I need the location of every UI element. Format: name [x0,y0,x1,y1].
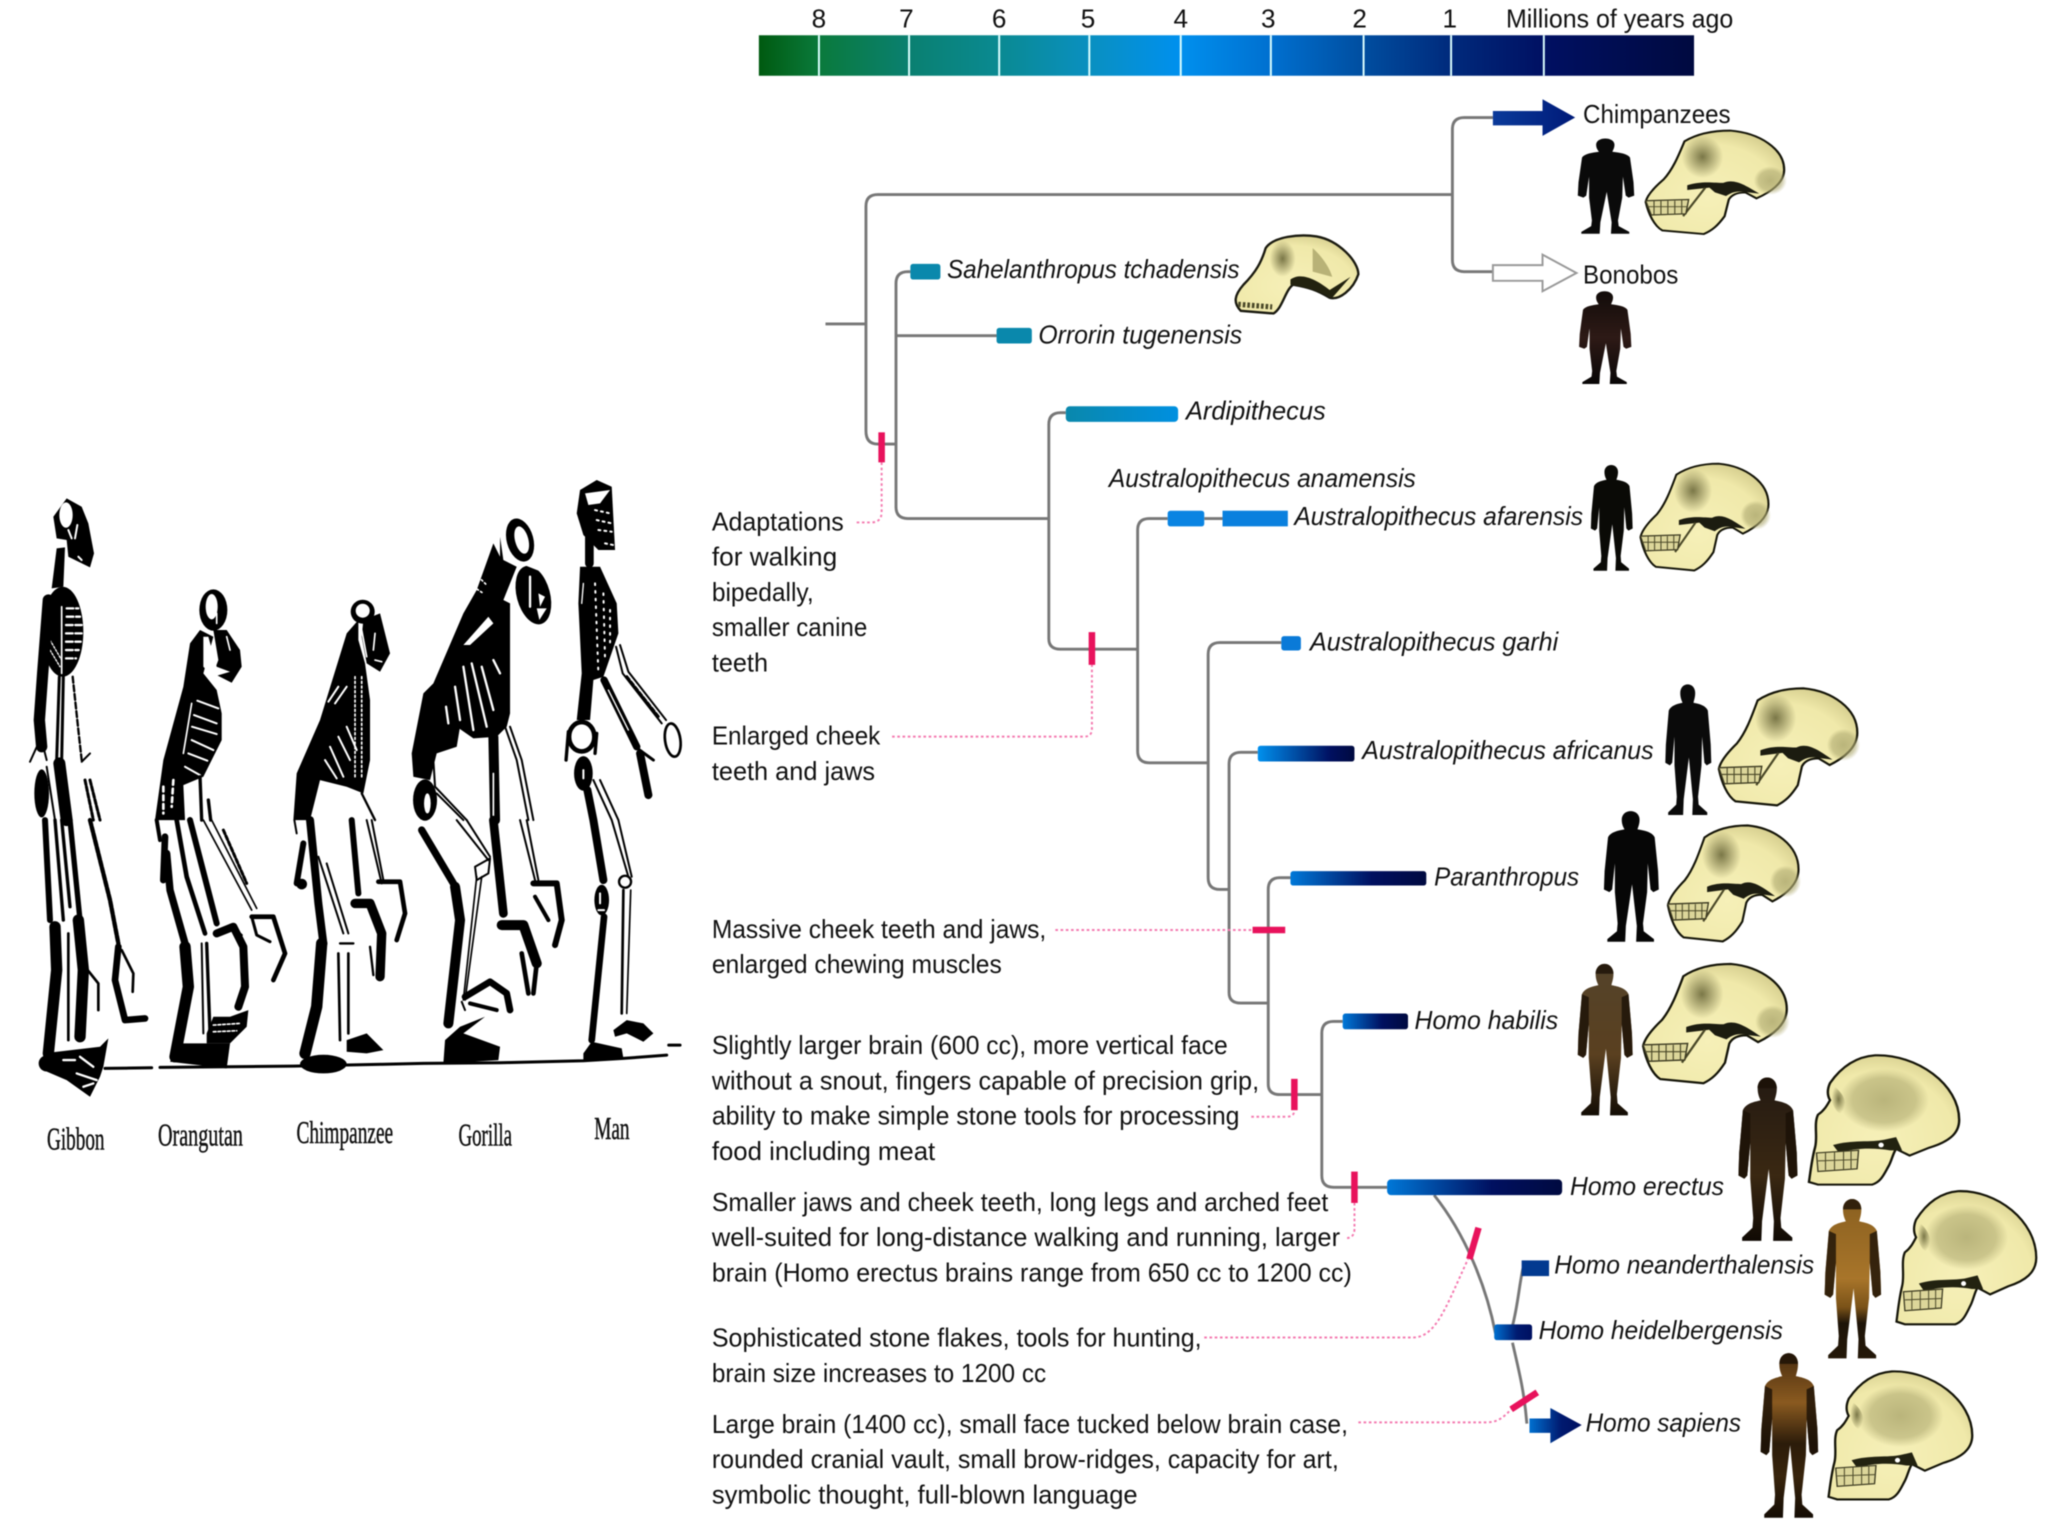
name: Australopithecus africanus [1360,735,1654,765]
duration bar: anamensis [1168,511,1204,526]
duration bar [1066,406,1178,422]
duration bar [997,328,1032,344]
scale numbers: 7 [899,3,914,33]
skull: chimpanzee [1646,131,1787,234]
name: Homo sapiens [1586,1408,1741,1438]
skeleton: man [566,480,683,1062]
figure: bonobo [1579,291,1631,384]
text: smaller canine [712,612,867,642]
text [711,1030,1259,1166]
text: Large brain (1400 cc), small face tucked below brain case, [712,1409,1348,1439]
text [712,1409,1348,1509]
figure: neanderthal [1825,1199,1881,1358]
trait tick and leader [1251,1110,1294,1117]
annotation: Large brain [712,1392,1537,1509]
name: Homo habilis [1415,1005,1558,1035]
text: bipedally, [712,577,814,607]
skull: neanderthal [1896,1191,2036,1324]
duration bar [1343,1014,1408,1029]
figure: erectus [1738,1078,1797,1241]
duration bar [910,264,940,280]
name: Orrorin tugenensis [1038,320,1242,350]
scale numbers: 8 [812,3,826,33]
text: symbolic thought, full-blown language [712,1479,1138,1509]
species: Australopithecus garhi [1281,626,1559,656]
figure: chimpanzee [1578,138,1634,234]
skeleton: gorilla [412,515,562,1063]
skeleton: gibbon [30,498,145,1097]
skull: afarensis [1640,464,1771,570]
figure: africanus [1665,684,1711,815]
text: for walking [712,542,837,572]
trait tick and leader [1055,929,1253,931]
name: Sahelanthropus tchadensis [947,254,1240,284]
branch: bonobos [1493,255,1678,384]
species: Homo erectus [1387,1055,1959,1241]
arrow: chimpanzees lineage [1493,99,1575,136]
name: afarensis: Australopithecus afarensis [1292,501,1583,531]
skull: africanus [1719,688,1860,805]
trait tick and leader [1345,1203,1354,1238]
timeline scale [759,3,1733,76]
name: anamensis: Australopithecus anamensis [1107,463,1416,493]
text [712,506,867,677]
skull: Sahelanthropus [1236,235,1358,313]
duration bar [1290,871,1426,886]
scale numbers: 3 [1261,3,1276,33]
species: Homo habilis [1343,964,1790,1115]
scale numbers: Millions of years ago [1506,3,1733,33]
species: Paranthropus [1290,811,1801,942]
skull: sapiens [1829,1371,1972,1499]
text: Smaller jaws and cheek teeth, long legs and arched feet [712,1187,1329,1217]
text: teeth [712,647,768,677]
species: Homo neanderthalensis [1522,1191,2036,1358]
text: rounded cranial vault, small brow-ridges, capacity for art, [712,1444,1339,1474]
species labels: Gibbon [47,1121,105,1156]
gradient time bar [759,35,1694,76]
name: Homo heidelbergensis [1539,1315,1783,1345]
species: Ardipithecus [1066,395,1326,425]
duration bar: afarensis [1223,511,1288,526]
text [712,914,1046,979]
annotation: Adaptations for walking bipedally [712,432,882,677]
branch: chimpanzees [1493,99,1787,234]
skull: erectus [1809,1055,1959,1185]
scale numbers: 5 [1081,3,1095,33]
name: Australopithecus garhi [1308,626,1559,656]
duration bar [1494,1324,1532,1340]
species: Orrorin tugenensis [997,320,1242,350]
skull: habilis [1643,964,1790,1083]
annotation: Sophisticated stone flakes [712,1228,1479,1388]
skeleton illustrations [30,480,683,1097]
name: Homo erectus [1570,1171,1724,1201]
figure: sapiens [1761,1353,1818,1518]
species labels: Chimpanzee [296,1115,393,1150]
annotation: Slightly larger brain [711,1030,1294,1166]
text: Enlarged cheek [712,720,881,750]
species labels: Orangutan [158,1117,243,1152]
annotation: Massive cheek teeth and jaws [712,914,1285,979]
species: Homo heidelbergensis [1494,1315,1783,1345]
species: Australopithecus africanus [1258,684,1860,815]
skeleton: orangutan [155,589,285,1068]
name: Ardipithecus [1184,395,1326,425]
duration bar [1387,1179,1562,1195]
text: Slightly larger brain (600 cc), more vertical face [712,1030,1228,1060]
annotation: Smaller jaws and cheek teeth [711,1172,1354,1287]
text: ability to make simple stone tools for processing [712,1101,1240,1131]
text: without a snout, fingers capable of precision grip, [711,1065,1259,1095]
annotation: Enlarged cheek teeth and jaws [712,632,1092,786]
name: Homo neanderthalensis [1554,1249,1814,1279]
species: Homo sapiens [1529,1353,1972,1518]
text: food including meat [712,1136,936,1166]
duration bar [1281,636,1301,650]
species labels [47,1111,630,1156]
skeleton: chimpanzee [293,600,405,1073]
text: Sophisticated stone flakes, tools for hunting, [712,1323,1202,1353]
trait tick and leader [1358,1408,1512,1422]
trait tick and leader [892,665,1092,737]
text: teeth and jaws [712,756,875,786]
label: bonobos: Bonobos [1583,259,1678,289]
scale numbers: 4 [1173,3,1188,33]
text: well-suited for long-distance walking and running, larger [711,1222,1340,1252]
name: Paranthropus [1434,862,1579,892]
label: chimpanzees: Chimpanzees [1583,99,1731,129]
text: enlarged chewing muscles [712,949,1002,979]
species: Australopithecus anamensis and afarensis [1107,463,1771,571]
text: Massive cheek teeth and jaws, [712,914,1046,944]
skull: Paranthropus [1668,825,1801,941]
scale numbers [812,3,1733,33]
arrow: bonobos lineage [1493,255,1576,291]
species labels: Man [594,1111,630,1146]
text [712,720,881,786]
scale numbers: 1 [1443,3,1457,33]
text [711,1187,1352,1287]
figure: afarensis [1591,465,1633,571]
figure: habilis [1578,964,1633,1115]
trait tick and leader [1204,1259,1468,1337]
duration bar [1258,746,1354,761]
ground line [105,1045,680,1068]
arrow: sapiens lineage [1529,1408,1582,1443]
text [712,1323,1202,1388]
duration bar [1522,1260,1549,1276]
species labels: Gorilla [458,1117,512,1152]
text: brain size increases to 1200 cc [712,1358,1046,1388]
panel: skeleton comparison of apes and man [30,480,683,1156]
species: Sahelanthropus tchadensis [910,235,1358,313]
text: brain (Homo erectus brains range from 650 cc to 1200 cc) [712,1257,1352,1287]
scale numbers: 6 [992,3,1006,33]
phylogenetic tree branches [825,118,1527,1424]
trait tick and leader [856,462,882,522]
text: Adaptations [712,506,844,536]
scale numbers: 2 [1352,3,1367,33]
figure: Paranthropus [1604,811,1659,942]
